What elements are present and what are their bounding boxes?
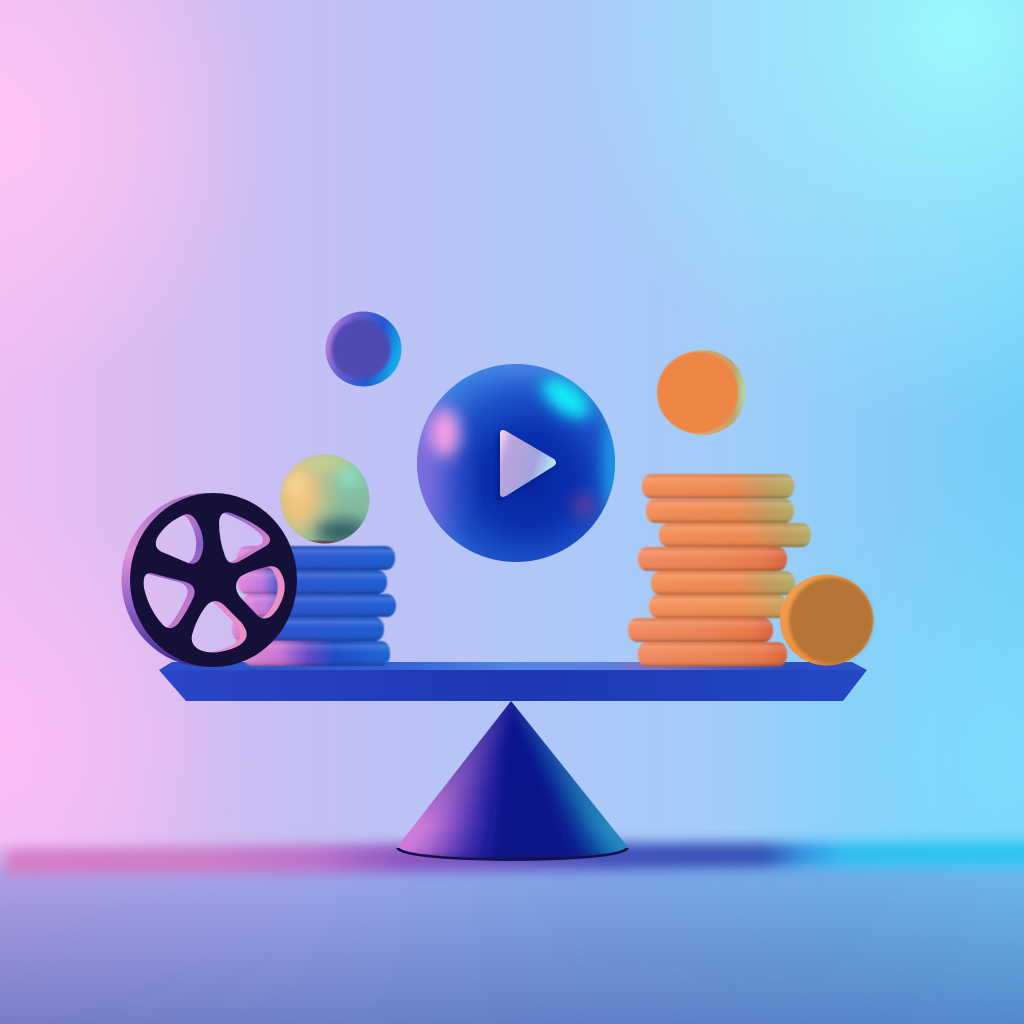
play triangle shadow — [497, 432, 558, 502]
blue coin 4 — [238, 570, 387, 594]
orange coin 5 — [638, 547, 787, 571]
orange coin 7 — [646, 499, 794, 523]
plank front face — [159, 670, 867, 701]
orange coin 6 — [659, 523, 811, 547]
orange coin 3 — [649, 595, 787, 618]
blue coin 5 — [237, 546, 395, 570]
orange coin 1 — [638, 642, 787, 666]
play button sphere — [417, 364, 615, 562]
orange coin 2 — [628, 618, 773, 642]
stack of orange coins — [628, 474, 811, 666]
blue coin 1 — [243, 641, 390, 666]
blue coin 2 — [232, 617, 384, 641]
plank top surface — [159, 662, 867, 670]
stack of blue coins — [232, 546, 396, 666]
floating purple disc — [326, 312, 402, 386]
balance plank — [159, 662, 867, 701]
blue coin 3 — [242, 594, 396, 617]
reel hole bevels — [147, 512, 285, 652]
orange coin 4 — [651, 571, 795, 595]
reel face — [130, 493, 297, 667]
orange coin 8 — [642, 474, 794, 498]
film reel icon — [122, 493, 297, 667]
floating orange coin — [657, 350, 746, 435]
leaning orange coin — [780, 574, 873, 666]
cone fulcrum — [396, 701, 629, 861]
small green-gold ball — [280, 454, 370, 544]
reel side rim — [122, 493, 292, 667]
floor shadow — [6, 841, 1024, 875]
play triangle — [500, 430, 556, 497]
